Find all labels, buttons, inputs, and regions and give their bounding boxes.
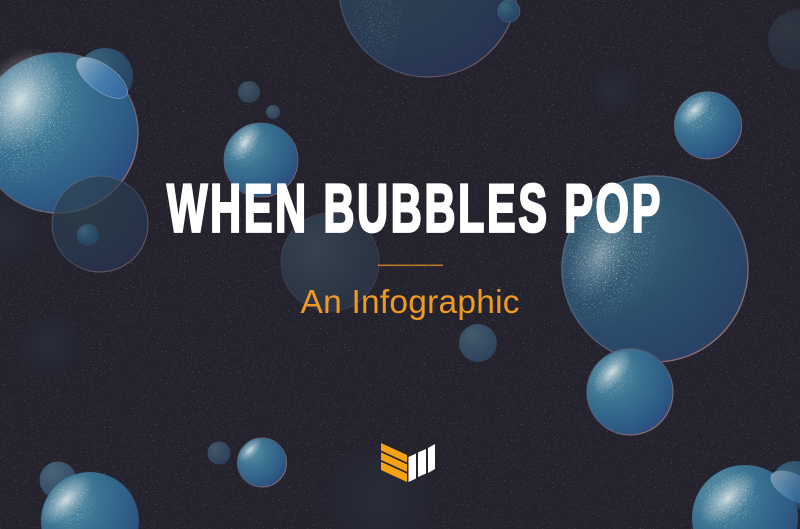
bubble: large right bbox=[554, 176, 748, 362]
bubble: lower right bbox=[585, 344, 673, 435]
bubble cluster: centre left bbox=[223, 81, 298, 197]
bubbles: bottom right bbox=[691, 461, 800, 529]
subtitle: An Infographic bbox=[300, 284, 520, 321]
bubble: centre dark bbox=[281, 213, 379, 311]
bubble: top right bbox=[674, 89, 742, 159]
icon: logo bbox=[381, 443, 435, 482]
bubble: large upper left with companions bbox=[0, 32, 148, 272]
bubble: small centre bbox=[459, 324, 497, 362]
divider bbox=[378, 264, 443, 266]
bubble: top centre bbox=[339, 0, 520, 77]
title: WHEN BUBBLES POP bbox=[167, 172, 660, 247]
bubbles: bottom left bbox=[32, 434, 287, 529]
